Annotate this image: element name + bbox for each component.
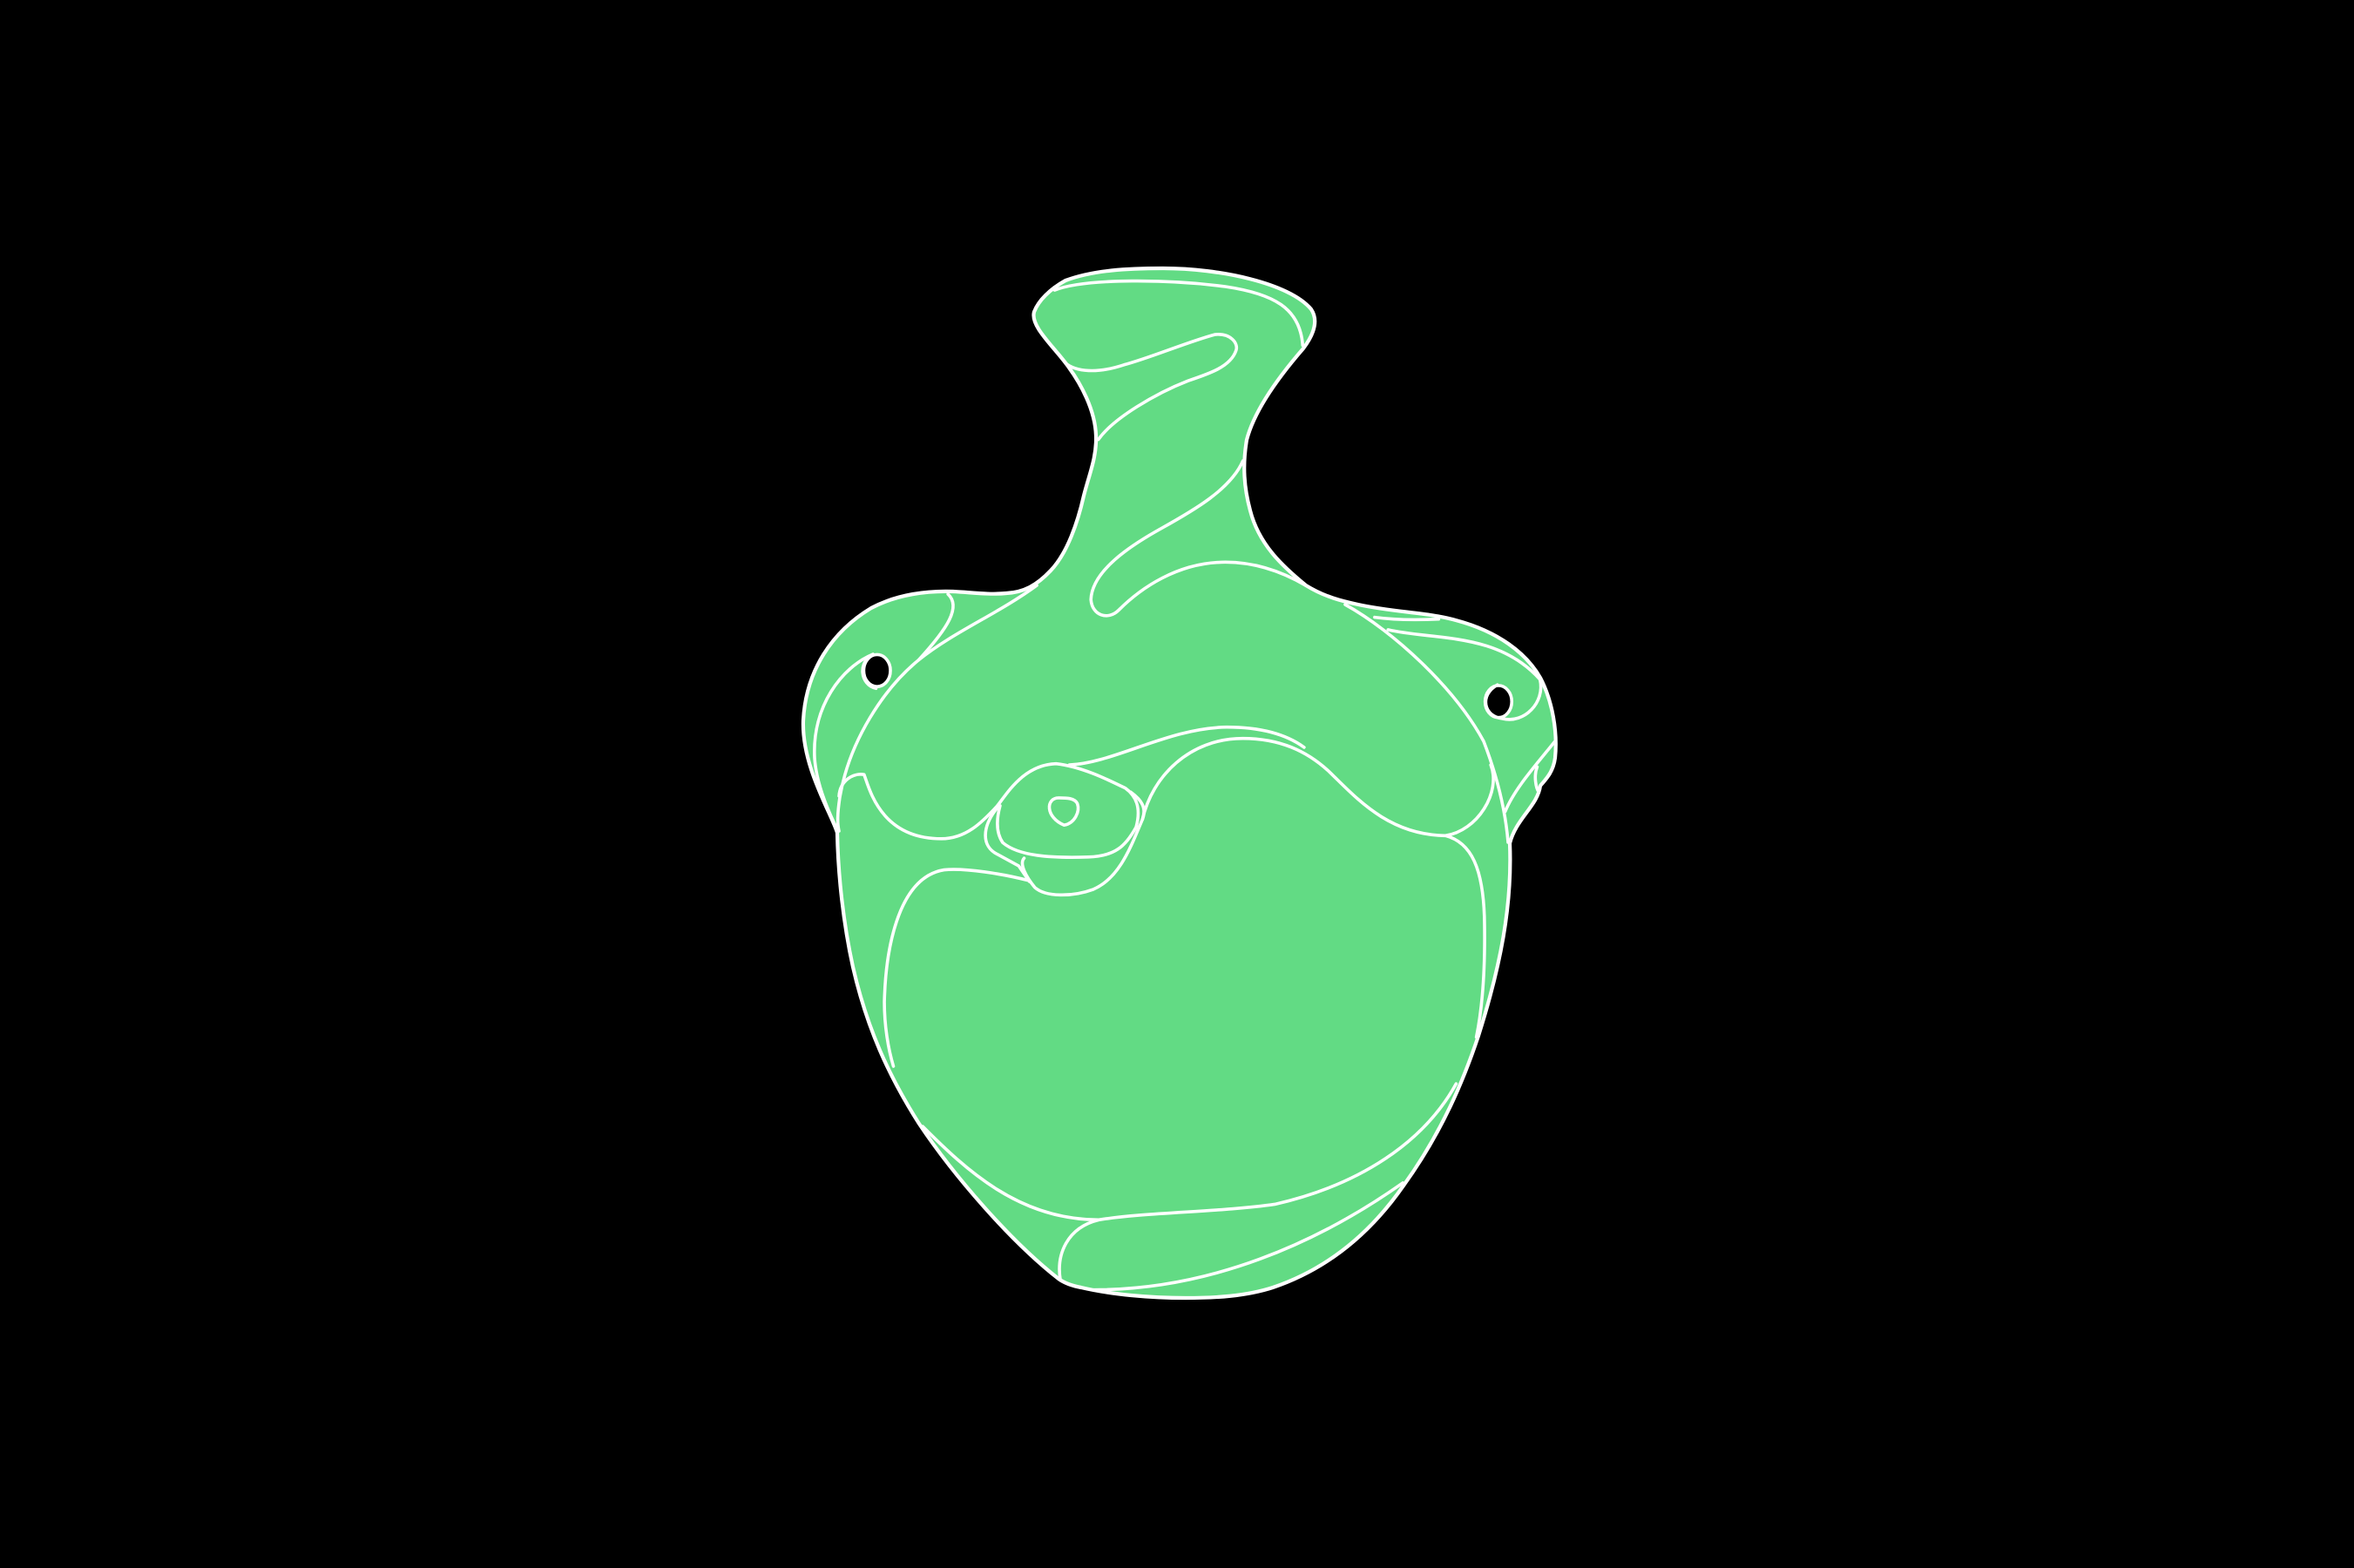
- top wave: [1070, 727, 1304, 765]
- right shoulder folds: [1375, 618, 1540, 679]
- left handle hole: [863, 654, 890, 686]
- bottom arcs: [923, 1084, 1456, 1281]
- second wave: [1142, 739, 1493, 835]
- right handle fold: [1485, 679, 1541, 720]
- neck swirl lower: [1091, 461, 1305, 616]
- left wave: [839, 774, 998, 839]
- left shoulder small curve: [918, 594, 953, 660]
- left handle fold: [862, 654, 876, 688]
- right handle lower folds: [1505, 741, 1555, 812]
- centre small ring: [1049, 798, 1078, 825]
- large belly panel right: [1445, 835, 1485, 1037]
- large belly panel left: [884, 869, 1030, 1066]
- lower contour lines: [839, 727, 1555, 1290]
- vase silhouette: [803, 268, 1556, 1298]
- right handle hole: [1485, 686, 1512, 718]
- upper contour lines: [862, 281, 1541, 720]
- centre blob: [998, 764, 1138, 857]
- body side lines: [815, 585, 1508, 842]
- lower blob: [1023, 792, 1144, 895]
- foot curve: [1093, 1183, 1403, 1290]
- centre blob outer fold: [985, 808, 1030, 882]
- lip inner line: [1055, 281, 1302, 345]
- neck swirl upper: [1065, 335, 1236, 440]
